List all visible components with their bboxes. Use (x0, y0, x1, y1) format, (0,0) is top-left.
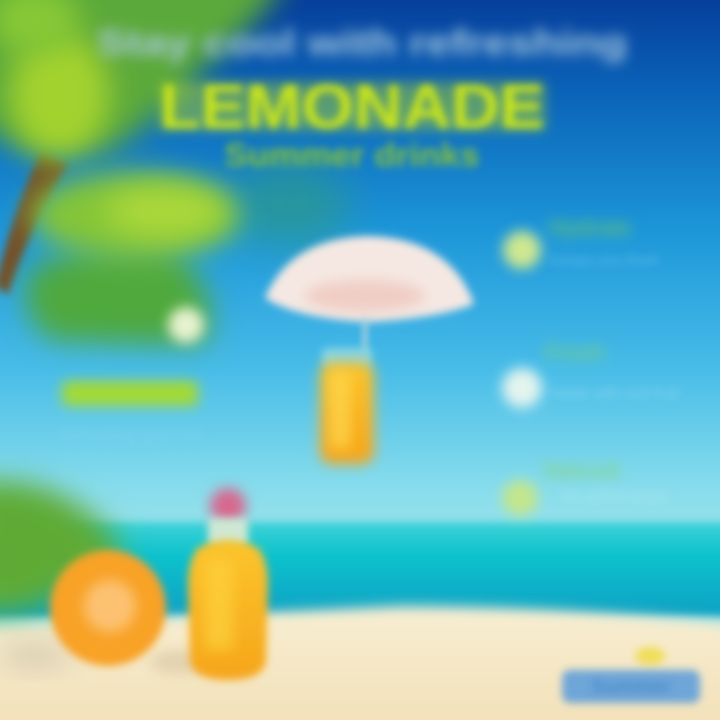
left callout description: Refreshing and cool (59, 427, 201, 444)
bottle shadow (150, 650, 210, 674)
benefit one label: Hydrate (549, 215, 631, 240)
heading group (97, 22, 627, 173)
title line: Stay cool with refreshing (97, 22, 627, 63)
orange shadow (0, 640, 73, 670)
palm fronds (0, 0, 350, 345)
callout: benefit two (502, 340, 679, 408)
left callout label (62, 381, 198, 406)
benefit two label: Fresh (545, 340, 605, 365)
bottle body (188, 540, 268, 680)
bottle highlight (205, 560, 233, 650)
benefit three description: No added sugar (562, 487, 668, 504)
logo badge (562, 647, 700, 703)
logo text: Summer (591, 676, 671, 698)
illustration: juice bottle (150, 488, 268, 680)
benefit three label: Natural (544, 458, 620, 483)
background: sea (0, 522, 720, 617)
benefit one description: Keeps you fresh (551, 252, 659, 269)
orange flesh (84, 580, 136, 632)
background: sand beach (0, 606, 720, 720)
left callout icon (168, 307, 204, 343)
icon: benefit three (502, 480, 538, 516)
parasol pink accent (305, 280, 425, 312)
left callout (59, 307, 204, 444)
illustration: parasol over glass (265, 236, 474, 464)
logo pill (562, 670, 700, 703)
callout: benefit one (503, 215, 659, 269)
illustration: green bush (0, 481, 125, 615)
main heading glow (160, 82, 545, 130)
bottle cap flower (210, 488, 246, 524)
subtitle: Summer drinks (224, 137, 480, 173)
icon: benefit one (503, 231, 541, 269)
callout: benefit three (502, 458, 668, 516)
logo yellow sun (635, 647, 665, 665)
parasol canopy (265, 236, 474, 322)
icon: benefit two (502, 368, 542, 408)
glass highlight (330, 372, 350, 448)
glass rim (322, 348, 372, 368)
orange rind (50, 550, 166, 666)
parasol pole (362, 318, 368, 354)
bottle neck (208, 518, 248, 546)
benefit two description: Made with real fruit (552, 385, 679, 402)
illustration: palm tree (0, 0, 350, 345)
palm trunk (0, 150, 68, 295)
glass of juice (320, 362, 374, 464)
main heading: LEMONADE (160, 73, 544, 142)
illustration: orange slice (0, 550, 166, 670)
